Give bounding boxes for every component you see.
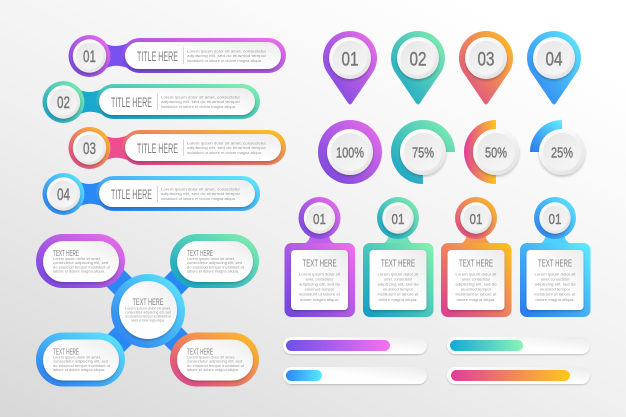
row 01: incididunt ut labore et dolore magna aliqua. [187, 58, 262, 63]
card purple: 01 [313, 211, 326, 228]
card warm: dolore magna aliqua. [456, 297, 496, 302]
panel: progress bars [283, 337, 590, 384]
card teal: 01 [392, 211, 404, 228]
panel: numbered title rows [42, 35, 286, 215]
row 04: TITLE HERE [111, 187, 152, 202]
card teal: eiusmod tempor [383, 287, 414, 292]
card blue: incididunt ut labore et [534, 292, 576, 297]
dial 100%: 100% [336, 146, 364, 162]
dial 75%: 75% [412, 146, 434, 162]
row 01: adipiscing elit, sed do eiusmod tempor [187, 53, 267, 58]
pin 02 [391, 31, 445, 104]
card blue: adipiscing elit, sed do [534, 282, 576, 286]
row 04: 04 [57, 186, 70, 204]
pin 04 [527, 31, 581, 104]
card teal: amet, consectetur [384, 276, 413, 281]
top-right node [170, 234, 259, 288]
card warm: adipiscing elit, sed do [456, 282, 497, 286]
row 03: adipiscing elit, sed do eiusmod tempor [187, 145, 267, 150]
row 02: incididunt ut labore et dolore magna aliqua. [161, 104, 236, 109]
row 03 [68, 127, 286, 169]
bottom-left node: consectetur adipiscing elit, sed [53, 359, 108, 364]
row 04 [42, 173, 260, 215]
card purple: Lorem ipsum dolor sit [299, 271, 341, 276]
card blue: TEXT HERE [538, 258, 572, 270]
top-left node: labore et dolore magna aliqua. [53, 268, 105, 273]
row 04: incididunt ut labore et dolore magna aliqua. [161, 196, 236, 201]
bottom-right node: Lorem ipsum dolor sit amet, [187, 354, 235, 360]
pin 03 [459, 31, 513, 104]
bottom-right node: consectetur adipiscing elit, sed [187, 359, 242, 364]
card purple: incididunt ut labore et [299, 292, 341, 297]
panel: hub diagram [36, 234, 259, 386]
pin 01 [323, 31, 377, 104]
card warm: TEXT HERE [459, 258, 493, 270]
card purple: eiusmod tempor [304, 287, 335, 292]
top-left node: TEXT HERE [53, 249, 79, 258]
row 01: TITLE HERE [137, 49, 178, 64]
top-right node: TEXT HERE [187, 249, 213, 258]
card blue: Lorem ipsum dolor sit [534, 271, 576, 276]
progress bar blue [283, 367, 427, 384]
card warm: incididunt ut labore et [456, 292, 497, 297]
top-left node: consectetur adipiscing elit, sed [53, 260, 108, 265]
card blue: 01 [548, 211, 562, 228]
card warm: Lorem ipsum dolor sit [456, 271, 497, 276]
pin 04: 04 [546, 50, 563, 70]
card purple: dolore magna aliqua. [300, 297, 339, 302]
pin 02: 02 [410, 50, 426, 70]
row 04: adipiscing elit, sed do eiusmod tempor [161, 191, 241, 196]
panel: percentage dials [318, 120, 585, 184]
card purple [284, 197, 355, 317]
progress bar teal [447, 337, 590, 354]
centre hub: Lorem ipsum dolor sit amet, [125, 306, 171, 311]
card warm [441, 197, 512, 317]
panel: tagged cards [284, 197, 590, 317]
card warm: 01 [470, 211, 482, 228]
bottom-right node: labore et dolore magna aliqua. [187, 367, 239, 372]
card teal: TEXT HERE [381, 258, 415, 270]
card blue [520, 197, 590, 317]
row 03: TITLE HERE [137, 141, 178, 156]
row 03: 03 [83, 140, 96, 158]
card blue: eiusmod tempor [540, 287, 571, 292]
bottom-left node [36, 332, 125, 386]
card teal: Lorem ipsum dolor sit [378, 271, 419, 276]
row 01: Lorem ipsum dolor sit amet, consectetur [187, 48, 267, 54]
bottom-right node: TEXT HERE [187, 348, 213, 356]
dial 50%: 50% [485, 146, 507, 162]
card blue: dolore magna aliqua. [536, 297, 574, 302]
centre hub: consectetur adipiscing elit, sed [125, 310, 171, 315]
bottom-left node: Lorem ipsum dolor sit amet, [53, 354, 101, 360]
dial 75% [391, 120, 455, 184]
card warm: eiusmod tempor [461, 287, 492, 292]
panel: map pins [323, 31, 581, 104]
bottom-left node: TEXT HERE [53, 348, 79, 356]
top-right node: do eiusmod tempor incididunt ut [187, 264, 245, 269]
top-right node: labore et dolore magna aliqua. [187, 268, 239, 273]
row 02: TITLE HERE [111, 95, 152, 110]
row 02: 02 [57, 94, 70, 112]
row 03: incididunt ut labore et dolore magna aliqua. [187, 150, 262, 155]
card purple: amet, consectetur [306, 276, 334, 281]
top-left node: do eiusmod tempor incididunt ut [53, 264, 111, 269]
card teal [363, 197, 434, 317]
row 01 [68, 35, 286, 77]
bottom-right node [170, 332, 259, 386]
centre hub [111, 274, 185, 348]
card teal: adipiscing elit, sed do [378, 282, 419, 286]
progress bar purple [283, 337, 427, 354]
card warm: amet, consectetur [462, 276, 491, 281]
pin 01: 01 [342, 50, 358, 70]
bottom-right node: do eiusmod tempor incididunt ut [187, 363, 245, 368]
row 04: Lorem ipsum dolor sit amet, consectetur [161, 186, 241, 192]
card blue: amet, consectetur [541, 276, 570, 281]
centre hub: TEXT HERE [132, 297, 164, 307]
row 03: Lorem ipsum dolor sit amet, consectetur [187, 140, 267, 146]
centre hub: labore et dolore magna aliqua. [132, 318, 164, 323]
hub connectors [108, 271, 188, 351]
card teal: incididunt ut labore et [378, 292, 419, 297]
dial 100% [318, 120, 382, 184]
dial 50% [464, 120, 519, 184]
centre hub: do eiusmod tempor incididunt ut [125, 314, 172, 319]
top-right node: Lorem ipsum dolor sit amet, [187, 256, 235, 261]
dial 25% [530, 120, 585, 175]
bottom-left node: do eiusmod tempor incididunt ut [53, 363, 111, 368]
card purple: TEXT HERE [302, 258, 337, 270]
card purple: adipiscing elit, sed do [299, 282, 341, 286]
row 02: adipiscing elit, sed do eiusmod tempor [161, 99, 241, 104]
top-left node: Lorem ipsum dolor sit amet, [53, 256, 101, 261]
row 01: 01 [83, 48, 96, 66]
top-right node: consectetur adipiscing elit, sed [187, 260, 242, 265]
top-left node [36, 234, 125, 288]
card teal: dolore magna aliqua. [378, 297, 418, 302]
row 02 [42, 81, 260, 123]
row 02: Lorem ipsum dolor sit amet, consectetur [161, 94, 241, 100]
dial 25%: 25% [551, 146, 573, 162]
pin 03: 03 [478, 50, 494, 70]
progress bar warm [447, 367, 590, 384]
bottom-left node: labore et dolore magna aliqua. [53, 367, 105, 372]
